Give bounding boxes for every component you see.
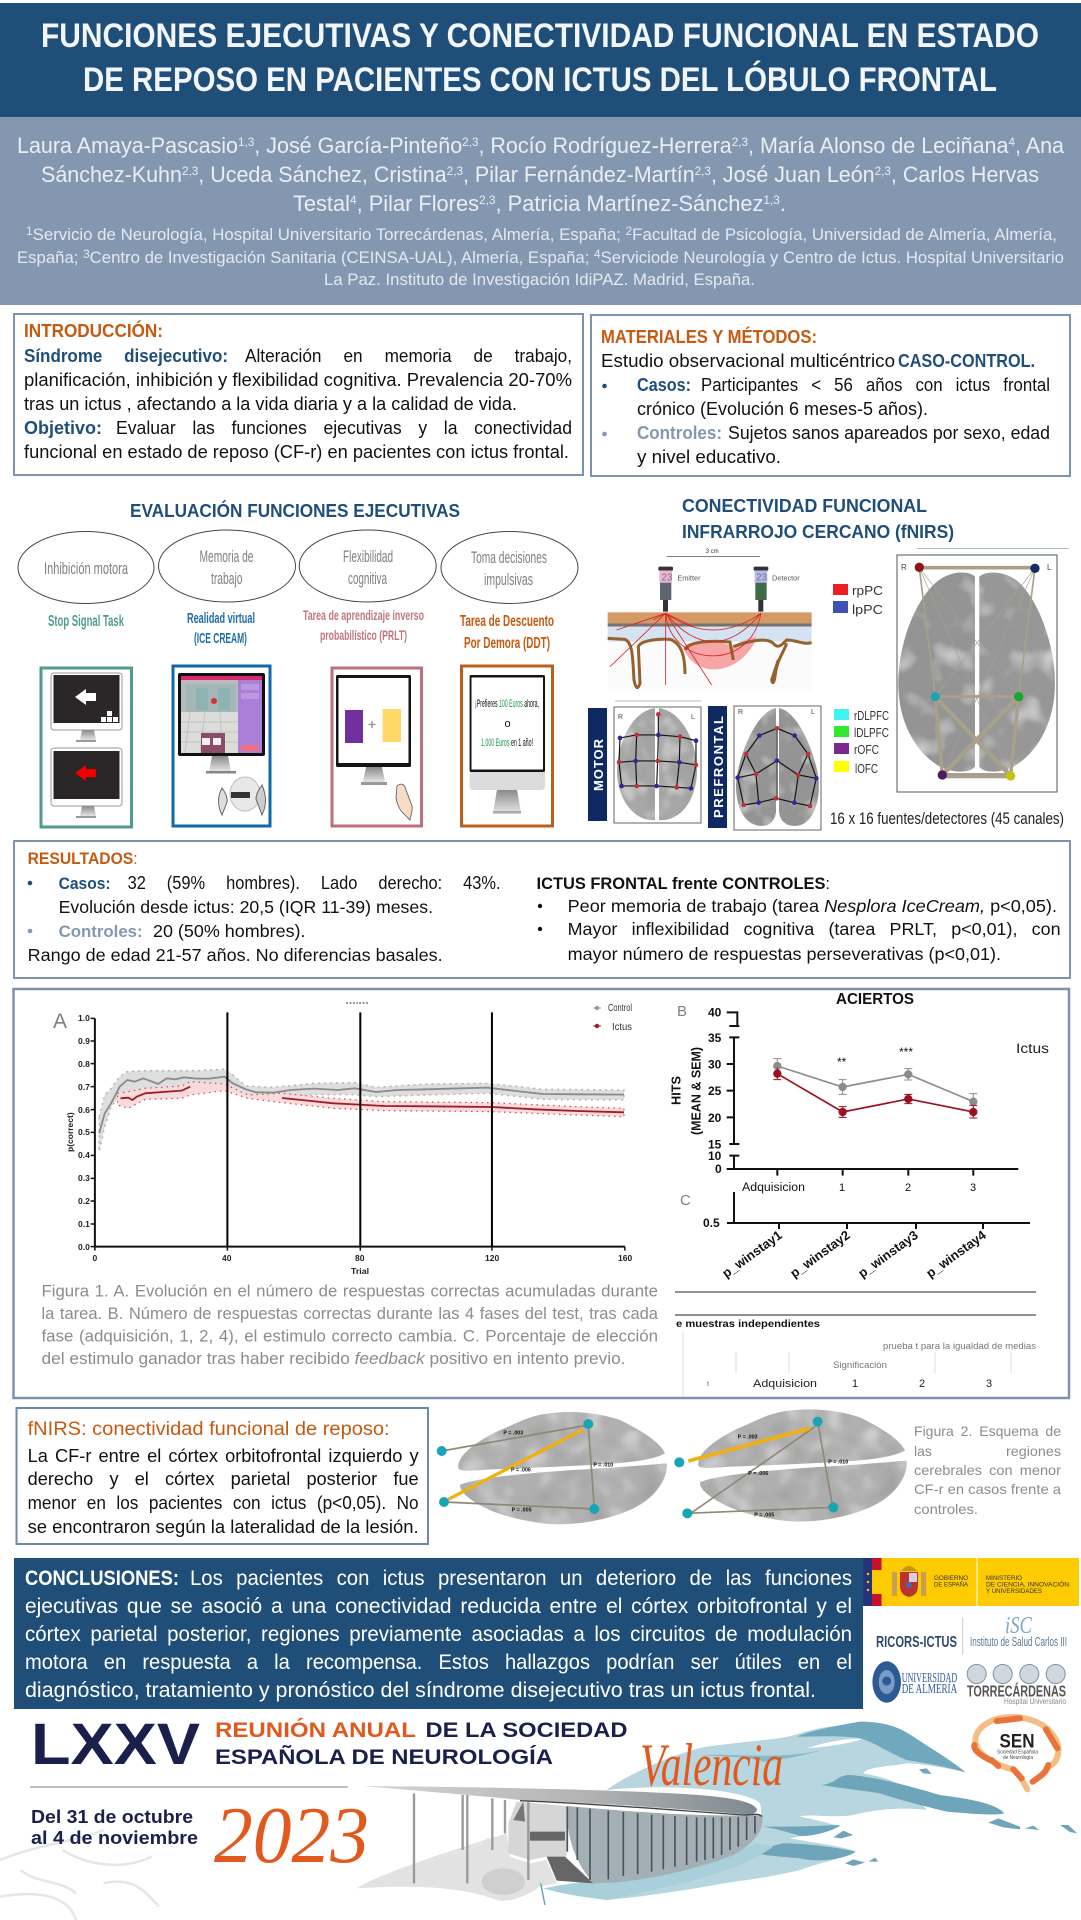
panel: conclusiones: ejecutivas que se asoció a una conectividad reducida entre el córtex orbitofrontal y el — [25, 1595, 852, 1618]
logo: gobierno de España: MINISTERIO — [986, 1576, 1022, 1582]
authors and affiliations band: La Paz. Instituto de Investigación IdiPAZ. Madrid, España. — [324, 270, 755, 289]
chart B: aciertos: 15 — [708, 1138, 722, 1152]
panel: conclusiones: CONCLUSIONES: — [25, 1567, 179, 1590]
legend: prefrontal regions: lDLPFC — [854, 725, 889, 740]
columns — [414, 1793, 528, 1883]
panel: stop signal task monitors — [41, 668, 132, 827]
chart A: correct responses over trials: 0.7 — [78, 1082, 90, 1092]
chart legend: Ictus — [612, 1021, 632, 1033]
diagram: fNIRS probe light path: 3 cm — [706, 549, 719, 555]
figure: brain connectivity left: P = .006 — [511, 1467, 531, 1473]
logo: gobierno de España: DE ESPAÑA — [934, 1582, 968, 1588]
text block: ictus frontal frente controles: mayor número de respuestas perseverativas (p<0,01). — [568, 944, 1001, 964]
authors and affiliations band: 3 — [83, 247, 90, 261]
diagram: fNIRS probe light path: Emitter — [677, 574, 701, 583]
text block: introducción: funcional en estado de reposo (CF-r) en pacientes con ictus frontal. — [24, 442, 569, 462]
figure: brain connectivity right — [674, 1409, 907, 1522]
legend: prefrontal regions: rDLPFC — [854, 708, 889, 723]
logo: SEN: SEN — [1000, 1732, 1034, 1753]
heading: resultados: RESULTADOS: — [28, 849, 138, 868]
chart B: aciertos: 40 — [708, 1006, 722, 1020]
chart C: p_winstay: p_winstay4 — [923, 1227, 989, 1281]
authors and affiliations band: 1,3 — [763, 193, 780, 207]
heading: conectividad funcional fNIRS — [682, 496, 954, 542]
authors and affiliations band: , Carlos Hervas — [891, 162, 1039, 187]
chart A: correct responses over trials: 0.4 — [78, 1150, 90, 1160]
legend: posterior parietal: rpPC — [852, 583, 883, 598]
chart: connectivity brain with nodes: L — [1047, 563, 1052, 572]
panel: virtual reality task — [173, 666, 270, 826]
event dates — [31, 1807, 198, 1848]
figure: brain connectivity right: P = .006 — [748, 1471, 768, 1477]
text block: introducción: Alteración en memoria de trabajo, — [245, 346, 572, 366]
chart legend — [593, 1002, 632, 1033]
chart B: aciertos: HITS — [668, 1076, 684, 1105]
text block: materiales y métodos: Sujetos sanos apareados por sexo, edad — [728, 423, 1050, 443]
authors and affiliations band: 2,3 — [447, 164, 463, 178]
chart A: correct responses over trials — [53, 1002, 632, 1276]
heading: introducción: INTRODUCCIÓN: — [24, 320, 163, 341]
logo: Torrecárdenas: Hospital Universitario — [1004, 1697, 1066, 1706]
icon: monitor with white arrow — [51, 673, 122, 742]
logo: gobierno de España: Y UNIVERSIDADES — [986, 1589, 1042, 1595]
text block: casos y controles: Controles: — [59, 922, 143, 941]
text block: introducción — [24, 346, 572, 462]
authors and affiliations band: 2 — [626, 224, 632, 238]
logo: Instituto de Salud Carlos III — [970, 1613, 1067, 1649]
figure: brain connectivity left: P = .005 — [512, 1508, 532, 1514]
event dates: al 4 de noviembre — [31, 1828, 198, 1848]
diagram: prefrontal montage — [734, 706, 821, 830]
text block: introducción: Síndrome disejecutivo: — [24, 346, 228, 366]
authors and affiliations band: , María Alonso de Leciñana — [748, 133, 1009, 158]
text block: casos y controles: Casos: — [59, 874, 111, 893]
authors and affiliations band: , José Juan León — [711, 162, 875, 187]
series: control — [773, 1059, 977, 1110]
diagram: executive function ellipses: impulsivas — [484, 570, 533, 589]
text block: ictus frontal frente controles: Mayor inflexibilidad cognitiva (tarea PRLT, p<0,01), con — [568, 919, 1061, 939]
chart C: p_winstay: p_winstay2 — [787, 1227, 853, 1281]
authors and affiliations band: Centro de Investigación Sanitaria (CEINSA-UAL), Almería, España; — [90, 248, 594, 267]
left block — [508, 1802, 567, 1860]
chart B: aciertos: 0 — [715, 1162, 722, 1176]
authors and affiliations band: . — [780, 191, 786, 216]
chart C: p_winstay: p_winstay1 — [719, 1227, 785, 1281]
heading: materiales y métodos: MATERIALES Y MÉTODOS: — [601, 326, 817, 347]
heading: fNIRS: fNIRS: conectividad funcional de reposo: — [28, 1419, 390, 1440]
authors and affiliations band: Sánchez-Kuhn — [41, 162, 185, 187]
table fragment: muestras independientes: 2 — [919, 1378, 925, 1390]
logo: SEN: de Neurología — [1003, 1755, 1033, 1761]
text block: fNIRS: menor en los pacientes con ictus (p<0,05). No — [28, 1493, 419, 1513]
caption: figura 1: Figura 1. A. Evolución en el número de respuestas correctas acumuladas durante — [42, 1282, 658, 1300]
authors and affiliations band: Serviciode Neurología y Centro de Ictus. Hospital Universitario — [601, 248, 1064, 267]
label: prefrontal — [708, 706, 727, 828]
chart A: correct responses over trials: 1.0 — [78, 1013, 90, 1023]
logo: Torrecárdenas — [967, 1664, 1066, 1706]
roof — [363, 1786, 757, 1814]
panel: figura 1 — [14, 989, 1069, 1398]
logo: gobierno de España: GOBIERNO — [934, 1576, 968, 1582]
text block: introducción: planificación, inhibición y flexibilidad cognitiva. Prevalencia 20-70% — [24, 370, 572, 390]
text block: fNIRS: se encontraron según la lateralidad de la lesión. — [28, 1517, 419, 1537]
text block: casos y controles: Evolución desde ictus: 20,5 (IQR 11-39) meses. — [59, 897, 433, 917]
table fragment: muestras independientes: 1 — [852, 1378, 858, 1390]
panel: conclusiones: córtex parietal posterior, regiones previamente asociadas a los circuitos de modulación — [25, 1623, 852, 1646]
text block: introducción: tras un ictus , afectando a la vida diaria y a la calidad de vida. — [24, 394, 517, 414]
panel: introducción — [14, 314, 583, 475]
banner: reunión anual LXXV — [0, 1712, 1077, 1920]
logo: SEN: Sociedad Española — [997, 1750, 1038, 1756]
authors and affiliations band: 2,3 — [479, 193, 496, 207]
diagram: prefrontal montage: R — [738, 709, 743, 716]
watercolor wash — [543, 1722, 1077, 1900]
caption: figura 1 — [42, 1282, 659, 1368]
year 2023: 2023 — [214, 1792, 369, 1880]
authors and affiliations band: 2,3 — [695, 164, 711, 178]
diagram: prefrontal montage: L — [811, 709, 815, 716]
authors and affiliations band: 2,3 — [732, 135, 748, 149]
chart A: correct responses over trials: 120 — [485, 1253, 499, 1263]
authors and affiliations band: , Pilar Fernández-Martín — [463, 162, 695, 187]
text block: materiales y métodos: Casos: — [637, 375, 691, 395]
diagram: fNIRS probe light path — [608, 549, 812, 691]
authors and affiliations band: Testal — [293, 191, 350, 216]
task labels: Stop Signal Task — [48, 613, 124, 630]
panel: materiales y métodos — [591, 315, 1070, 476]
authors and affiliations band: España; — [17, 248, 79, 267]
caption: figura 2: Figura 2. Esquema de — [914, 1423, 1061, 1439]
figure: brain connectivity left: P = .010 — [593, 1463, 613, 1469]
chart B: aciertos: ** — [837, 1055, 847, 1069]
chart C: p_winstay: 0.5 — [703, 1216, 720, 1230]
task labels: Realidad virtual — [187, 610, 255, 627]
chart B: aciertos: *** — [899, 1045, 913, 1059]
icon: monitor with VR scene — [178, 673, 265, 774]
task labels: Tarea de aprendizaje inverso — [303, 607, 424, 623]
text block: ictus frontal frente controles: Peor memoria de trabajo (tarea Nesplora IceCream, p<0,05). — [568, 896, 1057, 916]
text block: casos y controles: 32 (59% hombres). Lado derecho: 43%. — [128, 873, 501, 893]
authors and affiliations band: 2,3 — [462, 135, 479, 149]
chart A: correct responses over trials: 0.9 — [78, 1036, 90, 1046]
text block: materiales y métodos: Estudio observacional multicéntrico — [601, 351, 895, 371]
chart B: aciertos: 25 — [708, 1084, 722, 1098]
caption: figura 1: fase (adquisición, 1, 2, 4), el estimulo correcto cambia. C. Porcentaje de elección — [42, 1326, 658, 1346]
chart A: correct responses over trials: 0.5 — [78, 1127, 90, 1137]
table fragment: muestras independientes: Significación — [833, 1360, 887, 1370]
event title: REUNIÓN ANUAL — [215, 1718, 416, 1742]
task labels: probabilístico (PRLT) — [320, 627, 407, 643]
event title: ESPAÑOLA DE NEUROLOGÍA — [215, 1746, 553, 1769]
chart A: correct responses over trials: 0.1 — [78, 1219, 90, 1229]
building — [357, 1786, 773, 1905]
chart B: aciertos — [668, 991, 1049, 1194]
heading: conectividad funcional fNIRS: CONECTIVIDAD FUNCIONAL — [682, 496, 927, 516]
chart A: correct responses over trials: 0.6 — [78, 1105, 90, 1115]
legend: prefrontal regions: rOFC — [854, 742, 879, 757]
label: motor: MOTOR — [591, 738, 606, 791]
city Valencia: Valencia — [640, 1732, 783, 1798]
table fragment: muestras independientes: Adquisicion — [753, 1378, 817, 1390]
caption: figura 2: regiones — [1006, 1443, 1061, 1459]
chart: connectivity brain with nodes — [897, 555, 1057, 792]
authors and affiliations band: Servicio de Neurología, Hospital Universitario Torrecárdenas, Almería, España; — [33, 225, 626, 244]
diagram: fNIRS probe light path: 23 — [756, 573, 768, 584]
heading: evaluación funciones ejecutivas: EVALUACIÓN FUNCIONES EJECUTIVAS — [130, 500, 460, 521]
chart B: aciertos: 2 — [905, 1182, 911, 1194]
text block: casos y controles — [28, 873, 501, 965]
icon: VR headset and controllers — [218, 777, 266, 815]
icon: monitor with question: ¡Prefieres 100 Euros ahora, — [475, 698, 539, 710]
legend: posterior parietal — [833, 583, 883, 617]
diagram: executive function ellipses: trabajo — [211, 569, 242, 588]
panel: conclusiones: Los pacientes con ictus presentaron un deterioro de las funciones — [190, 1567, 852, 1590]
icon: monitor with question — [470, 675, 545, 814]
logo: Instituto de Salud Carlos III: iSC — [1005, 1613, 1033, 1639]
table fragment: muestras independientes — [675, 1292, 1036, 1397]
chart A: correct responses over trials: 0.8 — [78, 1059, 90, 1069]
text block: materiales y métodos: CASO-CONTROL. — [898, 351, 1035, 371]
chart A: correct responses over trials: A — [53, 1010, 67, 1033]
text block: materiales y métodos: crónico (Evolución 6 meses-5 años). — [637, 399, 928, 419]
table fragment: muestras independientes: 3 — [986, 1378, 992, 1390]
diagram: motor montage: L — [691, 714, 695, 721]
icon: hand — [396, 784, 412, 820]
authors and affiliations band: 2,3 — [182, 164, 199, 178]
task labels: Por Demora (DDT) — [464, 635, 550, 652]
chart A: correct responses over trials: 160 — [618, 1253, 632, 1263]
text block: introducción: Evaluar las funciones ejecutivas y la conectividad — [116, 418, 572, 438]
series: ictus — [773, 1068, 977, 1118]
chart A: correct responses over trials: 0.3 — [78, 1173, 90, 1183]
figure: brain connectivity right: P = .010 — [828, 1459, 848, 1465]
logo: SEN — [974, 1717, 1058, 1789]
event dates: Del 31 de octubre — [31, 1807, 193, 1827]
panel: resultados — [14, 841, 1070, 978]
task labels: (ICE CREAM) — [194, 630, 247, 647]
logo: gobierno de España — [863, 1558, 1079, 1606]
figure: brain connectivity left — [437, 1412, 667, 1524]
text block: materiales y métodos: y nivel educativo. — [637, 447, 781, 467]
label: prefrontal: PREFRONTAL — [711, 716, 726, 818]
panel: delay discounting task — [462, 666, 552, 826]
authors and affiliations band: , Pilar Flores — [357, 191, 479, 216]
authors and affiliations band: , Patricia Martínez-Sánchez — [496, 191, 763, 216]
diagram: executive function ellipses: Toma decisiones — [471, 548, 547, 567]
chart B: aciertos: 35 — [708, 1031, 722, 1045]
authors and affiliations band: Facultad de Psicología, Universidad de Almería, Almería, — [632, 225, 1057, 244]
authors and affiliations band: , Rocío Rodríguez-Herrera — [478, 133, 732, 158]
caption: figura 1: la tarea. B. Número de respuestas correctas durante las 4 fases del test, tras cada — [42, 1304, 659, 1323]
chart B: aciertos: 30 — [708, 1058, 722, 1072]
chart: connectivity brain with nodes: R — [901, 563, 907, 572]
text block: casos y controles: Rango de edad 21-57 años. No diferencias basales. — [28, 945, 443, 965]
diagram: motor montage: R — [618, 714, 623, 721]
authors and affiliations band: 4 — [594, 247, 601, 261]
chart B: aciertos: 3 — [970, 1182, 976, 1194]
task labels — [48, 607, 554, 652]
authors and affiliations band: Laura Amaya-Pascasio — [17, 133, 243, 158]
authors and affiliations band: 4 — [350, 193, 357, 207]
legend: prefrontal regions: lOFC — [855, 761, 878, 776]
diagram: fNIRS probe light path: Detector — [772, 574, 800, 583]
caption: figura 2: las — [914, 1443, 932, 1459]
text block: materiales y métodos: Participantes < 56 años con ictus frontal — [701, 375, 1050, 395]
panel: conclusiones: motora en respuesta a la recompensa. Estos hallazgos podrían ser útiles en el — [25, 1651, 852, 1674]
figure: brain connectivity left: P = .003 — [503, 1431, 523, 1437]
text block: materiales y métodos: Controles: — [637, 423, 722, 443]
text block: fNIRS — [28, 1446, 419, 1537]
task labels: Tarea de Descuento — [460, 613, 554, 630]
marble veins — [0, 1830, 159, 1920]
text block: materiales y métodos — [601, 351, 1050, 467]
caption: figura 2 — [914, 1423, 1061, 1517]
icon: coat of arms — [892, 1566, 926, 1597]
authors and affiliations band: 1 — [26, 224, 33, 238]
authors and affiliations band: 2,3 — [875, 164, 891, 178]
chart legend: Control — [608, 1002, 632, 1014]
chart C: p_winstay — [680, 1192, 1030, 1281]
event title — [215, 1718, 628, 1769]
diagram: executive function ellipses: cognitiva — [348, 569, 387, 588]
text block: fNIRS: derecho y el córtex parietal posterior fue — [28, 1469, 419, 1489]
chart B: aciertos: Adquisicion — [742, 1182, 805, 1194]
figure: brain connectivity right: P = .005 — [754, 1513, 774, 1519]
caption: figura 2: controles. — [914, 1501, 978, 1517]
legend: prefrontal regions — [834, 708, 889, 776]
caption: figura 1: del estimulo ganador tras haber recibido feedback positivo en intento previo. — [42, 1349, 626, 1368]
diagram: fNIRS probe light path: 23 — [661, 573, 673, 584]
logo: RICORS-ICTUS: RICORS-ICTUS — [876, 1634, 957, 1651]
logo: Universidad de Almería — [872, 1661, 958, 1703]
authors and affiliations band: , José García-Pinteño — [254, 133, 462, 158]
authors and affiliations band: 1,3 — [238, 135, 255, 149]
caption: figura 2: cerebrales con menor — [914, 1462, 1061, 1478]
diagram: executive function ellipses: Flexibilidad — [343, 547, 393, 566]
text block: ictus frontal frente controles: ICTUS FRONTAL frente CONTROLES: — [536, 874, 830, 893]
legend: posterior parietal: lpPC — [852, 602, 883, 617]
chart A: correct responses over trials: 40 — [222, 1253, 232, 1263]
chart B: aciertos: 1 — [839, 1182, 845, 1194]
table fragment: muestras independientes: prueba t para la igualdad de medias — [883, 1341, 1036, 1352]
icon: monitor with question: o — [504, 718, 511, 730]
text block: introducción: Objetivo: — [24, 418, 102, 438]
event title: DE LA SOCIEDAD — [426, 1719, 628, 1742]
text block: ictus frontal frente controles — [536, 874, 1061, 964]
figure: brain connectivity right: P = .003 — [738, 1434, 758, 1440]
header: title — [0, 3, 1081, 117]
panel: PRLT task — [332, 668, 422, 826]
heading: conectividad funcional fNIRS: INFRARROJO CERCANO (fNIRS) — [682, 522, 954, 542]
logo: Universidad de Almería: UNIVERSIDAD — [902, 1671, 957, 1686]
text block: fNIRS: La CF-r entre el córtex orbitofrontal izquierdo y — [28, 1446, 419, 1466]
chart A: correct responses over trials: 0.0 — [78, 1242, 90, 1252]
panel: conclusiones: diagnóstico, tratamiento y pronóstico del síndrome disejecutivo tras un ictus frontal. — [25, 1679, 816, 1702]
chart A: correct responses over trials: Trial — [351, 1266, 369, 1276]
panel: conclusiones — [14, 1558, 863, 1709]
chart A: correct responses over trials: 80 — [355, 1253, 365, 1263]
authors and affiliations band: , Ana — [1015, 133, 1065, 158]
authors and affiliations band — [0, 117, 1081, 305]
chart B: aciertos: (MEAN & SEM) — [688, 1047, 704, 1135]
icon: monitor with question: 1,000 Euros en 1 año! — [481, 737, 533, 749]
chart B: aciertos: 10 — [708, 1149, 722, 1163]
diagram: executive function ellipses — [18, 530, 578, 604]
LXXV: LXXV — [31, 1712, 200, 1777]
chart B: aciertos: Ictus — [1016, 1041, 1049, 1056]
authors and affiliations band: , Uceda Sánchez, Cristina — [198, 162, 447, 187]
caption: figura 2: CF-r en casos frente a — [914, 1481, 1061, 1497]
chart A: correct responses over trials: 0.2 — [78, 1196, 90, 1206]
logo: Universidad de Almería: DE ALMERÍA — [902, 1680, 958, 1697]
facade — [567, 1806, 763, 1883]
chart A: correct responses over trials: p(correct) — [65, 1112, 75, 1152]
chart B: aciertos: ACIERTOS — [836, 991, 914, 1008]
table fragment: muestras independientes: e muestras independientes — [676, 1318, 820, 1330]
text block: casos y controles: 20 (50% hombres). — [153, 921, 306, 941]
label: motor — [588, 708, 607, 821]
chart B: aciertos: 20 — [708, 1111, 722, 1125]
icon: monitor with red arrow — [51, 748, 122, 818]
diagram: executive function ellipses: Inhibición motora — [44, 559, 128, 578]
diagram: motor montage — [614, 707, 701, 823]
logo: gobierno de España: DE CIENCIA, INNOVACIÓN — [986, 1582, 1069, 1588]
icon: monitor with two stimuli — [336, 675, 411, 785]
diagram: executive function ellipses: Memoria de — [200, 547, 254, 566]
chart A: correct responses over trials: 0 — [92, 1253, 98, 1263]
chart B: aciertos: B — [677, 1003, 687, 1020]
panel: fNIRS conectividad funcional de reposo — [16, 1408, 428, 1544]
chart C: p_winstay: p_winstay3 — [855, 1227, 921, 1281]
table fragment: muestras independientes: t — [707, 1381, 709, 1388]
authors and affiliations band: 4 — [1008, 135, 1015, 149]
chart C: p_winstay: C — [680, 1192, 691, 1209]
